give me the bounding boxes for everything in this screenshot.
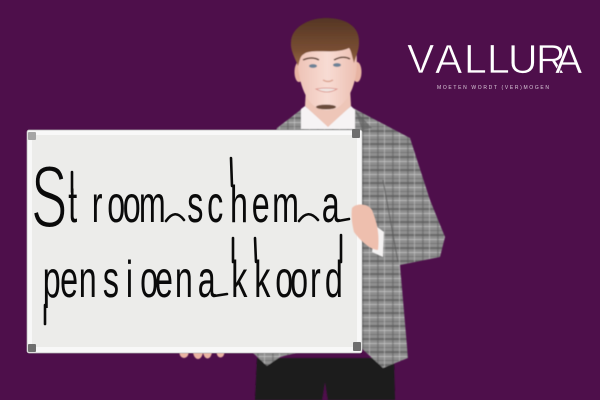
trousers — [255, 358, 395, 400]
blazer — [253, 108, 445, 368]
board surface — [32, 135, 357, 347]
ears — [294, 62, 304, 82]
neck — [305, 88, 351, 127]
logo: Vallura — [407, 36, 583, 91]
whiteboard — [27, 129, 362, 353]
right hand gripping the board edge — [352, 204, 384, 257]
logo wordmark: VALLURA — [407, 36, 583, 82]
nose — [323, 80, 333, 82]
person behind the whiteboard — [180, 18, 445, 400]
hair — [291, 18, 359, 66]
handwriting: Stroomschema: S — [31, 148, 67, 246]
goatee — [316, 105, 336, 109]
face — [298, 48, 357, 110]
corner brackets — [28, 129, 361, 352]
shirt cuff — [372, 226, 384, 257]
eyebrows — [303, 57, 350, 60]
mouth — [316, 88, 337, 92]
pen strokes extending the handwritten letters — [45, 158, 349, 324]
handwriting: pensioenakkoord: pensioenakkoord — [43, 251, 343, 309]
sleeve seam — [383, 180, 398, 262]
logo tagline: MOETEN WORDT (VER)MOGEN — [437, 85, 549, 91]
board frame — [27, 130, 362, 353]
lapel shadow — [353, 108, 372, 130]
fingers under the board — [180, 343, 224, 359]
eyes — [309, 64, 317, 68]
hand — [352, 204, 379, 250]
shirt collar — [301, 106, 355, 129]
handwriting: Stroomschema: troomschema — [68, 176, 340, 234]
